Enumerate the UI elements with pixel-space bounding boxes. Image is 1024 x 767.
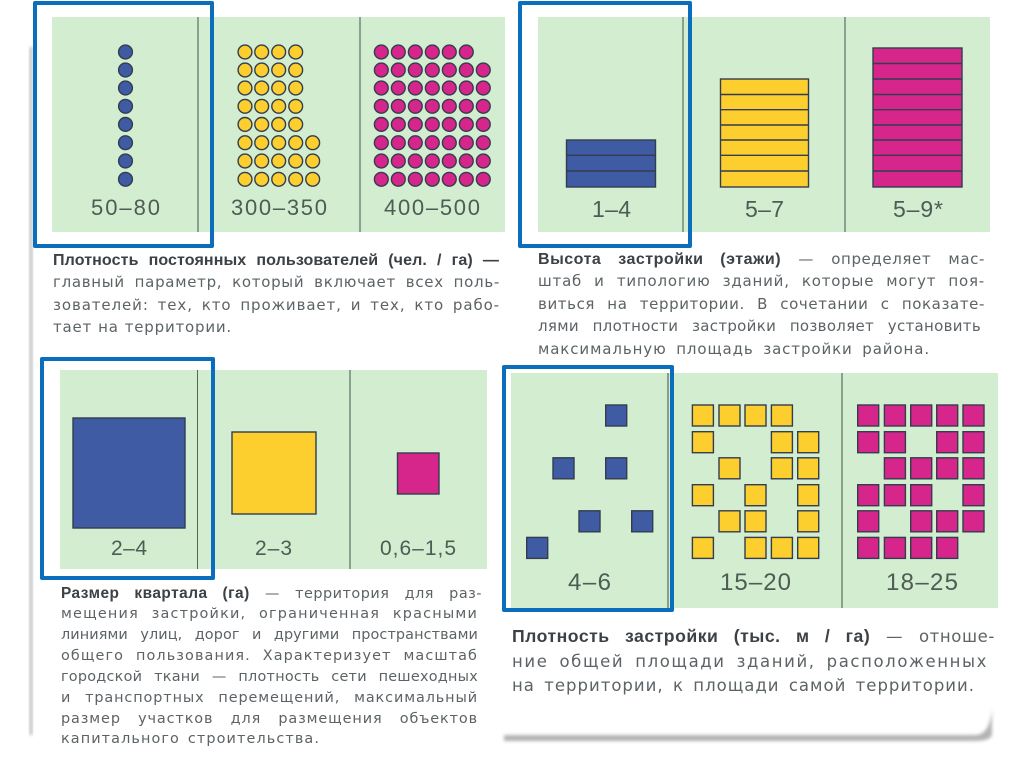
value labels: 5–9* bbox=[893, 196, 943, 222]
panel: building height bbox=[518, 1, 990, 358]
value labels: 4–6 bbox=[568, 569, 611, 596]
yellow building bbox=[720, 79, 809, 187]
highlight frame bbox=[33, 1, 214, 248]
value labels bbox=[91, 195, 480, 220]
description bbox=[512, 626, 995, 695]
value labels: 18–25 bbox=[886, 569, 958, 596]
value labels: 400–500 bbox=[384, 195, 480, 220]
description: максимальную площадь застройки района. bbox=[538, 340, 930, 358]
yellow square bbox=[232, 432, 316, 514]
magenta building bbox=[873, 48, 962, 187]
chart: floors bbox=[538, 17, 990, 232]
description: тает на территории. bbox=[53, 318, 232, 336]
panel: block size bbox=[40, 357, 487, 747]
highlight frame bbox=[518, 1, 692, 248]
value labels: 50–80 bbox=[91, 195, 160, 220]
blue square bbox=[73, 418, 185, 528]
description: Размер квартала (га) — территория для раз- bbox=[61, 584, 482, 602]
highlight frame bbox=[502, 365, 674, 612]
description: зователей: тех, кто проживает, и тех, кто рабо- bbox=[53, 296, 500, 314]
description: Плотность постоянных пользователей (чел. / га) — bbox=[53, 250, 499, 268]
blue building bbox=[566, 140, 656, 187]
value labels: 1–4 bbox=[592, 196, 631, 222]
description bbox=[61, 584, 482, 747]
description: линиями улиц, дорог и другими пространствами bbox=[61, 627, 478, 643]
yellow dots bbox=[238, 45, 320, 186]
description: общего пользования. Характеризует масштаб bbox=[61, 648, 478, 664]
description: штаб и типологию зданий, которые могут поя- bbox=[538, 272, 985, 290]
value labels bbox=[111, 537, 456, 560]
yellow squares bbox=[692, 405, 819, 558]
description: на территории, к площади самой территории. bbox=[512, 676, 975, 695]
value labels: 300–350 bbox=[231, 195, 327, 220]
magenta square bbox=[398, 453, 439, 494]
value labels: 5–7 bbox=[745, 196, 784, 222]
description bbox=[53, 250, 500, 336]
value labels bbox=[568, 569, 958, 596]
description: размер участков для размещения объектов bbox=[61, 711, 478, 727]
description bbox=[538, 250, 985, 358]
panel: density of permanent users bbox=[33, 1, 505, 336]
description: виться на территории. В сочетании с показате- bbox=[538, 294, 985, 312]
highlight frame bbox=[40, 357, 215, 580]
description: главный параметр, который включает всех поль- bbox=[53, 273, 500, 291]
chart: user density dots bbox=[52, 17, 505, 232]
panel: building density bbox=[502, 365, 998, 695]
chart: block squares bbox=[60, 370, 487, 569]
blue squares bbox=[527, 405, 653, 558]
value labels: 15–20 bbox=[720, 569, 791, 596]
description: Плотность застройки (тыс. м / га) — отноше- bbox=[512, 626, 995, 646]
description: ние общей площади зданий, расположенных bbox=[512, 652, 988, 671]
value labels: 2–4 bbox=[111, 537, 147, 560]
description: лями плотности застройки позволяет установить bbox=[538, 317, 981, 335]
blue dots bbox=[119, 45, 132, 186]
description: мещения застройки, ограниченная красными bbox=[61, 606, 478, 622]
description: капитального строительства. bbox=[61, 731, 320, 747]
description: городской ткани — плотность сети пешеходных bbox=[61, 669, 478, 685]
value labels: 0,6–1,5 bbox=[380, 537, 456, 560]
magenta squares bbox=[858, 405, 984, 558]
description: Высота застройки (этажи) — определяет мас- bbox=[538, 250, 985, 268]
value labels: 2–3 bbox=[255, 537, 292, 560]
chart: density squares bbox=[511, 373, 998, 608]
magenta dots bbox=[374, 45, 490, 186]
description: и транспортных перемещений, максимальный bbox=[61, 690, 478, 706]
value labels bbox=[592, 196, 943, 222]
